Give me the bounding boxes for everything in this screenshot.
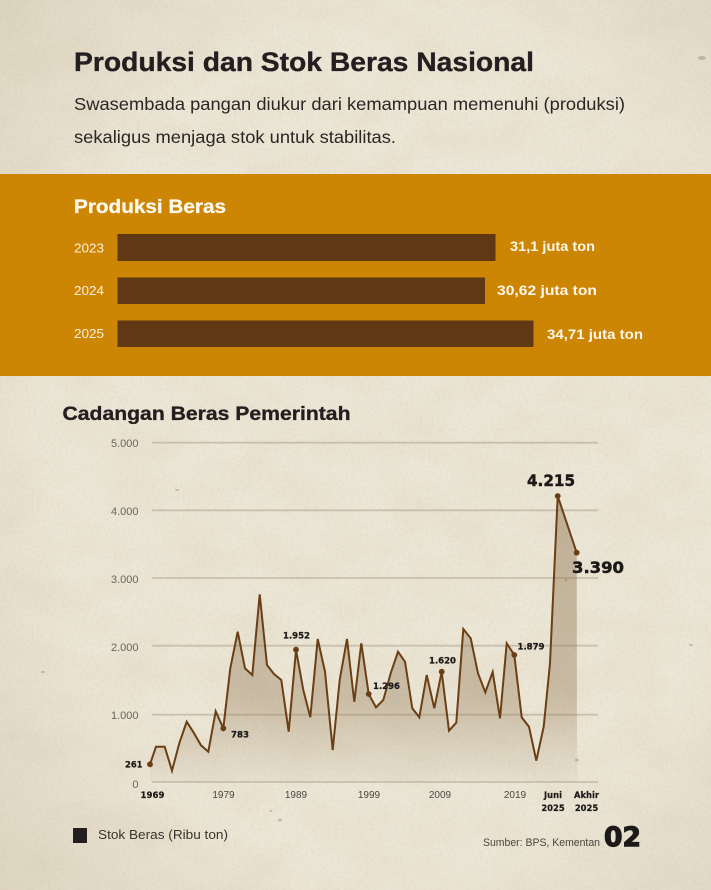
page number: 02 [604, 822, 641, 853]
data labels: 1.296 [373, 682, 400, 692]
y axis labels [111, 438, 138, 791]
x axis labels: 1979 [212, 790, 235, 801]
legend: Stok Beras (Ribu ton) [98, 827, 228, 842]
bar: 2024: 2024 [74, 284, 104, 298]
x axis labels: 1999 [358, 790, 381, 801]
x axis labels: 2009 [429, 790, 452, 801]
panel heading: Produksi Beras [74, 197, 226, 218]
bar: 2023 [74, 234, 595, 261]
data markers [147, 493, 580, 767]
chart heading: Cadangan Beras Pemerintah [62, 403, 350, 425]
title: Produksi dan Stok Beras Nasional [74, 47, 534, 77]
highlight labels [527, 471, 624, 577]
data labels: 1.620 [429, 656, 456, 666]
bar: 2023: 2023 [74, 242, 104, 256]
data line [150, 496, 577, 771]
bar: 2025 [74, 320, 643, 347]
data labels: 783 [231, 730, 249, 740]
x axis labels: 1969 [141, 791, 164, 801]
source note: Sumber: BPS, Kementan [483, 837, 600, 849]
bar: 2025: 34,71 juta ton [547, 327, 643, 342]
y axis labels: 0 [132, 779, 138, 791]
y axis labels: 3.000 [111, 574, 138, 586]
bar: 2024 [74, 278, 597, 304]
line chart: cadangan beras: Akhir [574, 790, 600, 800]
line chart: cadangan beras [111, 438, 624, 813]
bar: 2024: 30,62 juta ton [497, 283, 597, 298]
y axis labels: 5.000 [111, 438, 138, 450]
data labels: 261 [125, 760, 142, 770]
line chart: cadangan beras: Juni [543, 790, 562, 800]
y axis labels: 1.000 [111, 710, 138, 722]
shaded area under line [150, 496, 577, 782]
x axis labels: 1989 [285, 790, 308, 801]
x axis labels: 2019 [504, 790, 527, 801]
panel: produksi beras [0, 174, 711, 376]
y axis labels: 2.000 [111, 642, 138, 654]
header [74, 47, 625, 147]
highlight labels: 3.390 [572, 558, 624, 577]
line chart: cadangan beras: 2025 [541, 803, 565, 813]
subtitle line 2: sekaligus menjaga stok untuk stabilitas. [74, 127, 396, 147]
bar: 2025: 2025 [74, 327, 104, 341]
data labels: 1.879 [518, 642, 544, 652]
line chart: cadangan beras: 2025 [575, 803, 598, 813]
bar: 2023: 31,1 juta ton [510, 239, 595, 254]
highlight labels: 4.215 [527, 471, 575, 490]
subtitle line 1: Swasembada pangan diukur dari kemampuan memenuhi (produksi) [74, 94, 625, 114]
x axis labels [141, 790, 527, 801]
y axis labels: 4.000 [111, 506, 138, 518]
data labels: 1.952 [283, 632, 310, 642]
data labels [125, 632, 544, 770]
